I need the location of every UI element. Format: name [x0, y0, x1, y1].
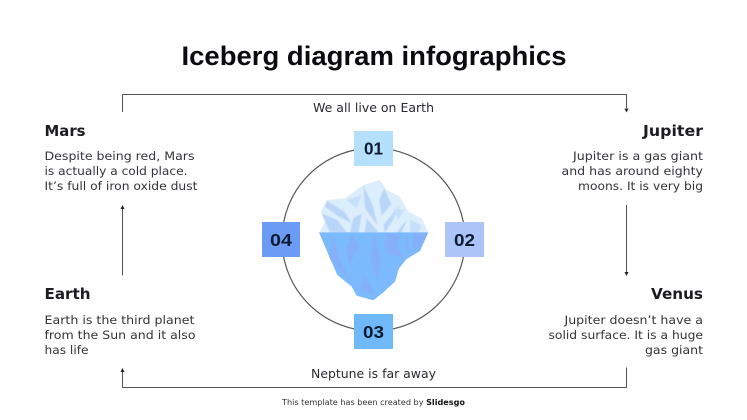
arrow: right connector — [624, 205, 628, 276]
iceberg bottom — [319, 232, 428, 300]
icon: box 02 — [445, 222, 484, 257]
text block: Earth description: has life — [44, 343, 88, 357]
icon: box 01 — [354, 131, 393, 166]
text block: Earth description — [44, 313, 196, 357]
heading: Venus: Venus — [651, 285, 703, 303]
text block: Mars description: Despite being red, Mars — [44, 149, 195, 163]
arrow: left connector — [120, 205, 124, 276]
text block: Mars description: It’s full of iron oxide dust — [44, 179, 198, 193]
title: Iceberg diagram infographics — [182, 41, 566, 71]
bottom caption: Neptune is far away — [311, 366, 437, 381]
icon: box 03 — [354, 314, 393, 349]
icon: box 02: 02 — [454, 230, 475, 250]
icon: box 04 — [262, 222, 300, 257]
text block: Venus description: gas giant — [645, 343, 704, 357]
panel: Earth — [44, 285, 196, 357]
text block: Mars description: is actually a cold place. — [44, 164, 188, 178]
icon: box 01: 01 — [364, 138, 383, 158]
text block: Venus description — [548, 313, 704, 357]
text block: Jupiter description: and has around eighty — [562, 164, 703, 178]
icon: iceberg — [319, 180, 428, 300]
top caption: We all live on Earth — [313, 100, 434, 115]
panel: Venus — [548, 285, 704, 357]
heading: Earth: Earth — [44, 285, 90, 303]
text block: Venus description: solid surface. It is a huge — [548, 328, 703, 342]
text block: Venus description: Jupiter doesn’t have a — [563, 313, 703, 327]
icon: box 03: 03 — [363, 322, 384, 342]
panel: Mars — [44, 122, 198, 193]
text block: Jupiter description — [562, 149, 704, 193]
text block: Jupiter description: moons. It is very big — [578, 179, 703, 193]
heading: Jupiter: Jupiter — [642, 122, 703, 140]
footer credit: This template has been created by Slidesgo — [281, 398, 465, 407]
iceberg top — [319, 180, 428, 232]
arrow: bottom connector — [120, 368, 626, 388]
text block: Mars description — [44, 149, 198, 193]
chart: circle ring — [282, 148, 465, 331]
heading: Mars: Mars — [44, 122, 86, 140]
arrow: top connector — [122, 94, 628, 112]
icon: box 04: 04 — [270, 230, 292, 250]
text block: Earth description: from the Sun and it also — [44, 328, 196, 342]
text block: Earth description: Earth is the third planet — [44, 313, 195, 327]
text block: Jupiter description: Jupiter is a gas giant — [572, 149, 704, 163]
panel: Jupiter — [562, 122, 704, 193]
